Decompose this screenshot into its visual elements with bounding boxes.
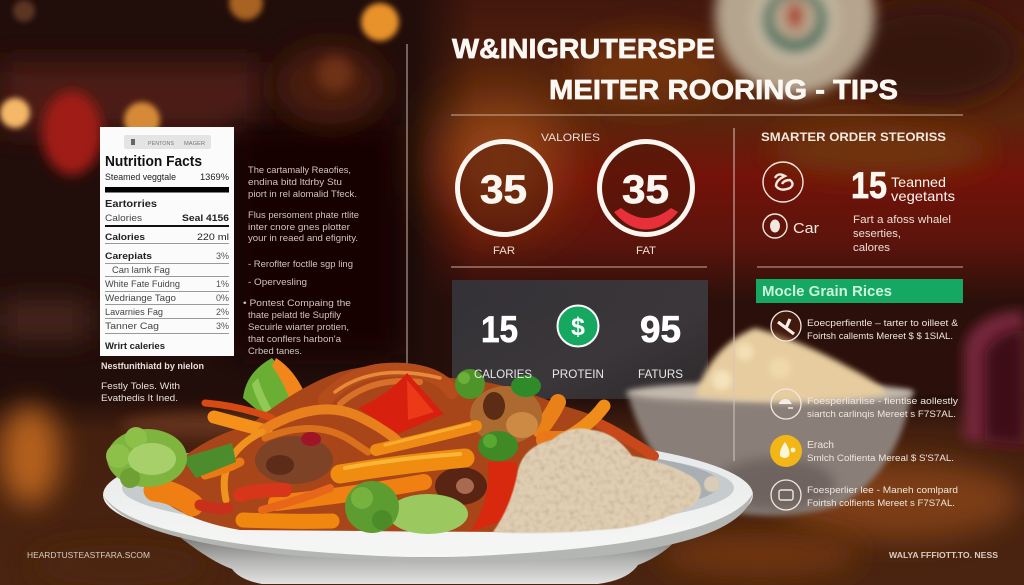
title: W&INIGRUTERSPE [452, 33, 715, 64]
footer right: WALYA FFFIOTT.TO. NESS [889, 551, 999, 560]
meat [255, 386, 542, 505]
label rows [105, 172, 230, 352]
tip 3: Erach [807, 439, 834, 451]
gauge rule [451, 266, 707, 268]
tip 2 [771, 389, 958, 420]
description text column [243, 165, 359, 356]
broccoli bottom [345, 481, 468, 534]
note below label: Nestfunithiatd by nielon [101, 361, 204, 371]
label header pill: PENTONS [148, 141, 174, 147]
label rows: 3% [216, 251, 230, 262]
tip 4: Foesperlier lee - Maneh comlpard [807, 485, 958, 496]
description text column: Flus persoment phate rtlite [248, 210, 359, 220]
stat: 15 lean vegetables: Teanned [891, 174, 946, 190]
grain tips list [770, 311, 959, 510]
tip 1: Eoecperfientle – tarter to oilleet & [807, 318, 959, 329]
vertical divider right [733, 128, 735, 461]
gauge: fat [600, 142, 692, 257]
macro stats values [474, 306, 683, 381]
note below label: Evathedis It Ined. [101, 393, 178, 403]
tip description [853, 214, 951, 254]
label rows: 3% [216, 321, 230, 332]
icon: knot [763, 162, 803, 202]
label rows: 1% [216, 279, 230, 290]
gauge: far: 35 [480, 168, 527, 212]
stat: protein: $ [571, 313, 585, 341]
tip description: Fart a afoss whalel [853, 214, 951, 226]
tip 2: Foesperliarlise - fientlse aollestly [807, 396, 958, 407]
description text column: inter cnore gnes plotter [248, 222, 350, 232]
logo disc, blurred [715, 0, 875, 95]
description text column: endina bitd ltdrby Stu [248, 177, 342, 187]
small broccoli florets [455, 369, 541, 461]
description text column: - Reroflter foctlle sgp ling [248, 259, 353, 269]
stat: fats [638, 309, 683, 381]
stat: 15 lean vegetables: 15 [851, 165, 887, 206]
tip 1 [771, 311, 959, 342]
description text column: your in reaed and efignity. [248, 233, 358, 243]
macro stats panel [452, 280, 708, 399]
tips rule [757, 266, 963, 268]
green pepper behind [243, 358, 309, 416]
green banner [756, 279, 963, 303]
tip 4: Foirtsh colfients Mereet s F7S7AL. [807, 498, 955, 509]
label rows: Steamed veggtale [105, 172, 176, 182]
label rows: 2% [216, 307, 230, 318]
smarter order tips panel [761, 130, 955, 254]
label rows: Eartorries [105, 199, 157, 210]
gauge: fat: 35 [622, 168, 669, 212]
label rows: Tanner Cag [105, 321, 159, 332]
gauge: fat: FAT [636, 245, 656, 257]
label rows: 0% [216, 293, 230, 304]
title [452, 33, 898, 105]
background rice bowl [626, 328, 914, 515]
label rows: Calories [105, 232, 145, 243]
label rows: Calories [105, 213, 142, 224]
description text column: Crbed tanes. [248, 346, 302, 356]
label title: Nutrition Facts [105, 153, 202, 170]
carrot sticks [155, 424, 476, 521]
label rows: Wedriange Tago [105, 293, 176, 304]
gauge: far [458, 142, 550, 257]
description text column: that conflers harbon'a [248, 334, 342, 344]
stat: protein [552, 306, 604, 381]
stat: 15 lean vegetables [851, 165, 955, 206]
red pepper [358, 373, 444, 434]
label rows: Can lamk Fag [112, 265, 170, 276]
note below label: Festly Toles. With [101, 381, 180, 391]
label rows: 1369% [200, 172, 229, 182]
tip description: seserties, [853, 228, 901, 240]
green banner: Mocle Grain Rices [762, 284, 892, 300]
description text column: The cartamally Reaofies, [248, 165, 351, 175]
red pepper strip [470, 462, 517, 532]
title: MEITER ROORING - TIPS [549, 74, 898, 105]
chair [964, 310, 1024, 445]
calorie and fat gauges [458, 132, 692, 257]
stat: fats: 95 [640, 309, 681, 350]
stat: 15 lean vegetables: vegetants [891, 188, 955, 204]
tip 4 [771, 480, 958, 510]
vertical divider left [406, 44, 408, 366]
icon: leaf [763, 214, 787, 238]
description text column: Secuirle wiarter protien, [248, 322, 349, 332]
food base [150, 365, 656, 532]
tips heading: SMARTER ORDER STEORISS [761, 130, 946, 144]
tip 3 [770, 435, 954, 467]
footer left: HEARDTUSTEASTFARA.SCOM [27, 551, 150, 560]
description text column: - Opervesling [248, 277, 307, 287]
stat: calories: CALORIES [474, 367, 532, 381]
rice [493, 428, 720, 533]
tip 1: Foirtsh callemts Mereet $ $ 1SIAL. [807, 331, 953, 342]
tip 3: Smlch Colfienta Mereal $ S'S7AL. [807, 453, 954, 464]
description text column: piort in rel alomalid Tfeck. [248, 189, 357, 199]
tip 2: siartch carlinqis Mereet s F7S7AL. [807, 409, 956, 420]
gauge heading: VALORIES [541, 132, 600, 144]
stat: fats: FATURS [638, 367, 683, 381]
title rule [451, 114, 963, 116]
description text column: • Pontest Compaing the [243, 298, 351, 308]
noodles [205, 370, 654, 500]
label header pill: MAGER [184, 141, 205, 147]
label rows: White Fate Fuidng [105, 279, 180, 290]
plate of stir fry with rice [103, 358, 753, 584]
broccoli left [106, 427, 236, 488]
note below label [101, 361, 204, 403]
stat: calories [474, 309, 532, 381]
tip description: calores [853, 242, 891, 254]
plate [103, 433, 753, 584]
gauge: far: FAR [493, 245, 515, 257]
label rows: Seal 4156 [182, 213, 229, 224]
label rows: 220 ml [197, 232, 229, 243]
nutrition facts label [100, 127, 234, 356]
label rows: Lavarnies Fag [105, 307, 163, 318]
label rows: Carepiats [105, 251, 152, 262]
stat: calories: 15 [481, 309, 518, 350]
description text column: thate pelatd tle Supfily [248, 310, 341, 320]
label header pill [124, 135, 211, 149]
label: car: Car [793, 220, 819, 237]
stat: protein: PROTEIN [552, 367, 604, 381]
label rows: Wrirt caleries [105, 341, 165, 352]
